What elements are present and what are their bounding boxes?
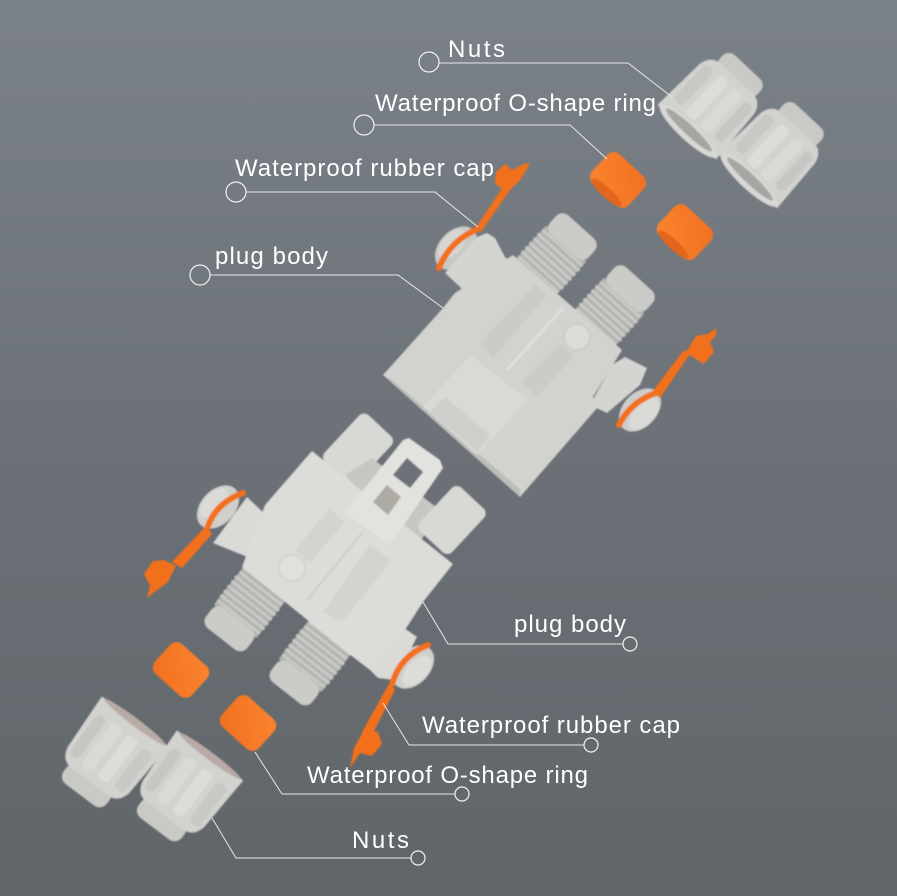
plug body: upper	[383, 208, 669, 497]
o-shape rings: upper pair	[585, 148, 717, 265]
callout: plug body top: plug body	[215, 243, 328, 270]
callout: Waterproof rubber cap bottom: Waterproof rubber cap	[422, 712, 680, 739]
callout: plug body bottom: plug body	[514, 611, 626, 638]
callout: Waterproof O-shape ring bottom	[255, 752, 588, 801]
callout: Nuts top	[419, 36, 672, 97]
emblem	[564, 324, 590, 350]
upper nut left	[654, 40, 777, 163]
ear left	[445, 233, 520, 300]
latch	[345, 438, 443, 545]
latch seat	[423, 355, 528, 455]
cap upper left	[439, 163, 530, 268]
label plate	[480, 285, 547, 358]
lower ring 2	[216, 691, 280, 755]
latch upper window	[393, 458, 423, 488]
body shell	[242, 451, 453, 670]
latch insert	[373, 485, 401, 515]
stub 1	[320, 411, 396, 487]
moulded line	[307, 533, 362, 600]
stub 2	[415, 483, 489, 557]
upper ring 2	[652, 200, 717, 265]
lower ring 1	[149, 638, 213, 702]
callout: Waterproof O-shape ring bottom: Waterproof O-shape ring	[307, 762, 588, 789]
threaded tube 1	[510, 208, 602, 302]
cap disc left	[189, 477, 247, 537]
ear right	[370, 623, 417, 680]
cap lower right	[350, 645, 428, 768]
callout: Nuts bottom	[212, 818, 425, 865]
ear right	[590, 357, 647, 413]
cap lower left	[144, 493, 243, 598]
cap disc right	[611, 380, 669, 440]
callout: Nuts bottom: Nuts	[352, 827, 409, 854]
nuts: lower pair	[47, 694, 245, 854]
plug body: lower	[189, 411, 489, 710]
lower nut left	[47, 694, 170, 820]
callout: plug body bottom	[423, 602, 637, 651]
o-shape rings: lower pair	[149, 638, 280, 755]
upper nut right	[715, 89, 838, 212]
latch backing	[345, 458, 440, 550]
callout: Nuts top: Nuts	[448, 36, 505, 63]
callout: Waterproof O-shape ring top: Waterproof O-shape ring	[375, 90, 656, 117]
threaded tube 1	[199, 562, 290, 656]
callout: Waterproof O-shape ring top	[354, 90, 656, 159]
callout: Waterproof rubber cap top: Waterproof rubber cap	[235, 155, 494, 182]
latch window	[430, 397, 490, 452]
rating plate	[323, 545, 392, 622]
cap disc right	[384, 637, 442, 697]
lower nut right	[122, 728, 245, 854]
moulded line	[507, 308, 563, 370]
threaded tube 2	[568, 260, 660, 354]
rubber caps: upper	[439, 163, 716, 425]
emblem	[279, 555, 305, 581]
rating plate	[522, 343, 573, 397]
upper ring 1	[585, 148, 650, 213]
cap disc left	[427, 218, 485, 278]
ear left	[213, 497, 268, 560]
cap upper right	[619, 328, 716, 425]
threaded tube 2	[264, 616, 355, 710]
shaded side	[383, 375, 520, 497]
callout: plug body top	[190, 243, 443, 308]
callout: Waterproof rubber cap bottom	[383, 703, 680, 752]
nuts: upper pair	[654, 40, 838, 212]
callout: Waterproof rubber cap top	[226, 155, 494, 227]
label plate	[295, 508, 345, 563]
rubber caps: lower	[144, 493, 428, 768]
body shell	[383, 255, 622, 497]
